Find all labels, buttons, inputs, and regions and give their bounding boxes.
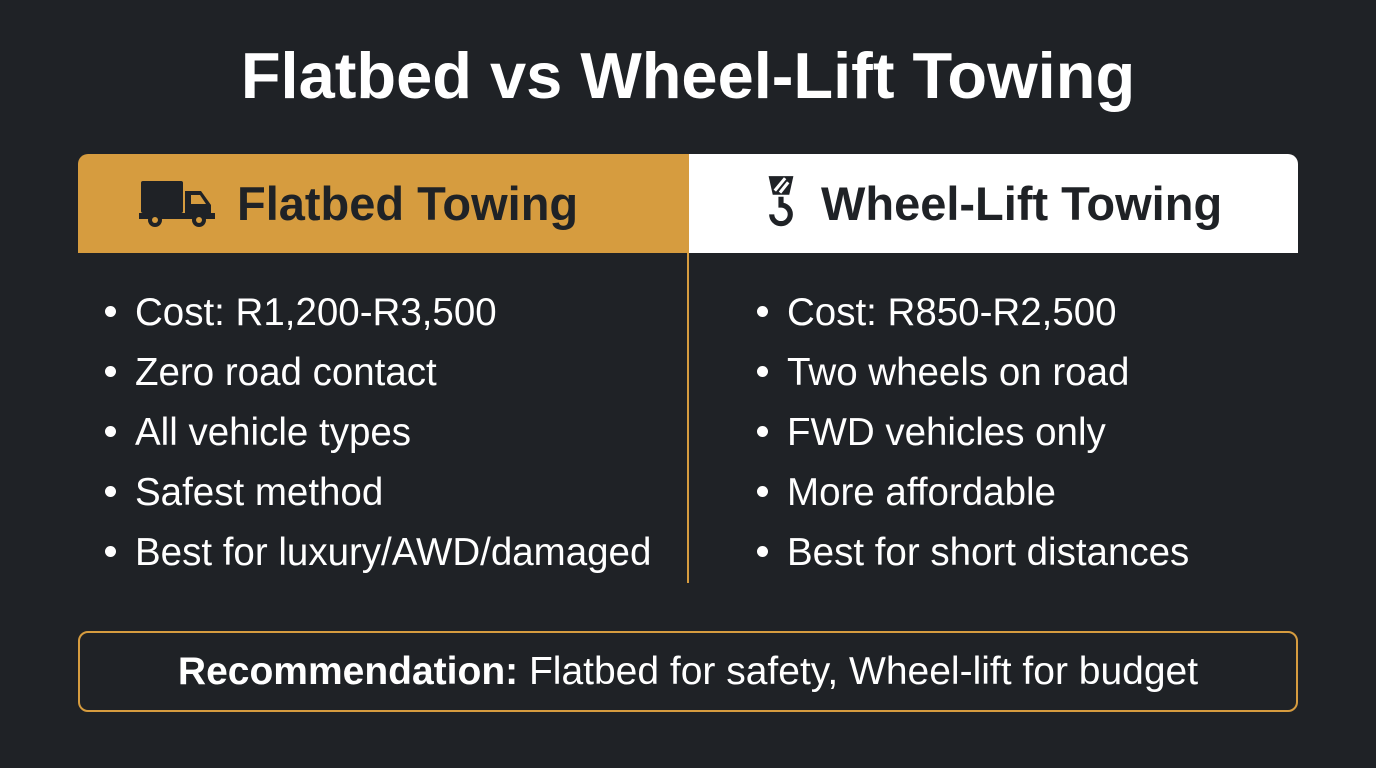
list: flatbed: All vehicle types: [135, 411, 411, 454]
recommendation box: Recommendation: Flatbed for safety, Wheel-lift for budget: [178, 650, 1198, 692]
list: wheel-lift: FWD vehicles only: [787, 411, 1106, 454]
icon: truck: [139, 181, 215, 227]
header: wheel-lift: [689, 154, 1298, 253]
list: flatbed: Safest method: [135, 471, 383, 514]
list: flatbed: Cost: R1,200-R3,500: [135, 291, 497, 334]
list: flatbed: Zero road contact: [135, 351, 437, 394]
header: flatbed: [78, 154, 689, 253]
list: flatbed: [105, 291, 651, 574]
icon: hook: [768, 176, 794, 226]
list: wheel-lift: [757, 291, 1189, 574]
list: wheel-lift: More affordable: [787, 471, 1056, 514]
list: wheel-lift: Best for short distances: [787, 531, 1189, 574]
divider: [687, 253, 689, 583]
list: flatbed: Best for luxury/AWD/damaged: [135, 531, 651, 574]
title: Flatbed vs Wheel-Lift Towing: [241, 39, 1135, 112]
header: flatbed: Flatbed Towing: [237, 177, 578, 230]
list: wheel-lift: Two wheels on road: [787, 351, 1129, 394]
list: wheel-lift: Cost: R850-R2,500: [787, 291, 1117, 334]
header: wheel-lift: Wheel-Lift Towing: [821, 177, 1222, 230]
recommendation box: [78, 631, 1298, 712]
